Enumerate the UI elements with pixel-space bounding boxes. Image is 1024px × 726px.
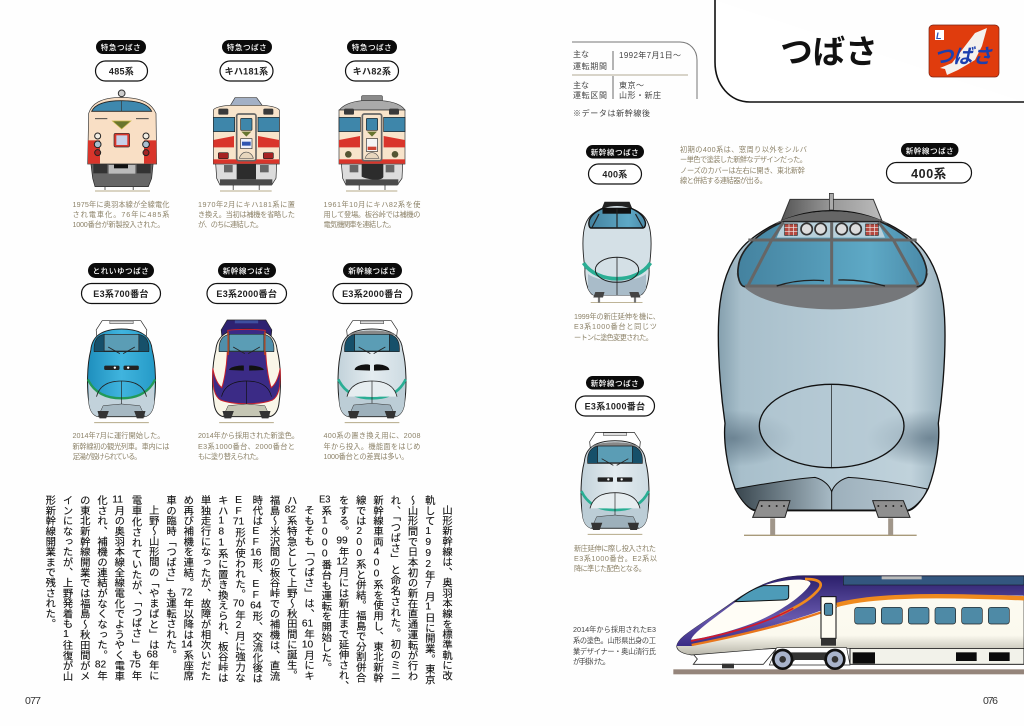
train: E3 2000 purple front — [213, 320, 280, 423]
caption — [574, 544, 657, 573]
label: 新幹線つばさ — [586, 145, 644, 158]
card: E3系1000番台 — [574, 376, 657, 573]
vertical body text: 電車化されていたが、「つばさ」も 75 年 — [129, 495, 141, 681]
caption — [198, 200, 295, 229]
label: 新幹線つばさ — [218, 263, 276, 278]
title panel — [715, 0, 1024, 102]
vertical body text: 11 月の奥羽本線全線電化でようやく電車 — [112, 495, 123, 681]
vertical body text: 車の臨時「つばさ」も運転された。 — [164, 495, 175, 660]
train: 485 series front — [88, 90, 157, 191]
vertical body text: キハ181系に置き換えられ、板谷峠は — [216, 495, 227, 682]
label: large 新幹線つばさ: 新幹線つばさ — [906, 146, 954, 156]
label: とれいゆつばさ: とれいゆつばさ — [93, 266, 149, 276]
card: E3系700番台 — [72, 263, 170, 461]
caption: 1975年に奥羽本線が全線電化 — [72, 200, 170, 209]
vertical body text: E3 系1000番台も運転を開始した。 — [319, 495, 330, 673]
label: 新幹線つばさ — [343, 263, 402, 278]
vertical body text: 化され、補機の連結がなくなった。 82 年 — [95, 495, 106, 681]
vertical body text: の東北新幹線開業では福島～秋田間がメ — [78, 495, 89, 681]
icon: tsubasa headmark logo: L — [936, 31, 942, 41]
caption: 1961年10月にキハ82系を使 — [324, 200, 420, 209]
caption: 用して登場。板谷峠では補機の — [324, 210, 420, 219]
vertical body text: ハ 82 系特急として上野～秋田間に誕生。 — [285, 495, 296, 680]
train: large 400 series front — [718, 193, 946, 536]
vertical body text: 形新幹線開業まで残された。 — [43, 495, 54, 629]
train: KiHa 82 front — [339, 96, 405, 191]
data table: 1992年7月1日～ — [619, 50, 681, 60]
caption: 1000番台との差異は多い。 — [324, 452, 408, 461]
caption — [574, 312, 660, 342]
label: E3系1000番台 — [576, 396, 654, 416]
label: 485系: 485系 — [109, 66, 134, 76]
caption: 年から投入。機能面をはじめ — [324, 442, 420, 451]
data table: 運転期間 — [573, 61, 607, 71]
vertical body text: そもそも「つばさ」は、 61 年 10 月にキ — [302, 505, 313, 681]
label: E3系700番台: E3系700番台 — [93, 288, 149, 299]
icon: tsubasa headmark logo: つばさ — [934, 46, 993, 68]
card: 400系 small — [574, 145, 660, 342]
label: 新幹線つばさ: 新幹線つばさ — [348, 266, 397, 276]
train: KiHa 181 front — [213, 98, 279, 191]
caption: 1999年の新庄延伸を機に、 — [574, 312, 660, 321]
note: 400 series description: ノーズのカバーは左右に開き、東北新幹 — [680, 166, 805, 175]
caption: 2014年7月に運行開始した。 — [72, 431, 164, 440]
caption: 2014年から採用された新塗色。 — [198, 431, 299, 440]
label: large 新幹線つばさ — [901, 143, 958, 157]
note: 400 series description — [680, 145, 807, 185]
label: キハ82系: キハ82系 — [353, 66, 391, 76]
label: 新幹線つばさ: 新幹線つばさ — [591, 147, 639, 157]
note: E3 livery: 系の塗色。山形県出身の工 — [573, 636, 656, 645]
label: E3系1000番台: E3系1000番台 — [585, 400, 645, 412]
caption: 新庄延伸に際し投入された — [574, 544, 656, 553]
note: 400 series description: 初期の400系は、窓周り以外をシルバ — [680, 145, 807, 154]
caption — [72, 431, 170, 461]
caption: 新幹線初の観光列車。車内には — [72, 442, 170, 451]
vertical body text: EF 71 形が使われた。 70 年2月に強力な — [233, 495, 244, 683]
note: 400 series description: ー単色で塗装した新鮮なデザインだった。 — [680, 155, 807, 164]
data table: 山形・新庄 — [619, 91, 661, 100]
vertical body text: 福島～米沢間の板谷峠での補機は、直流 — [268, 495, 278, 681]
train: E3 side view — [673, 576, 1024, 674]
train: E3 1000 front — [581, 432, 649, 534]
data table: 東京～ — [619, 80, 644, 90]
caption: 電気機関車を連結した。 — [324, 220, 396, 229]
card: E3系2000番台 silver — [324, 263, 420, 461]
label: キハ181系 — [220, 61, 273, 81]
card: 485系 — [72, 40, 170, 229]
label: 特急つばさ: 特急つばさ — [352, 42, 392, 52]
label: 400系 — [588, 164, 642, 184]
card: E3系2000番台 purple — [198, 263, 299, 461]
label: E3系2000番台: E3系2000番台 — [216, 288, 277, 299]
caption: E3系1000番台。E2系以 — [574, 554, 657, 563]
icon: tsubasa headmark logo — [929, 25, 999, 77]
card: キハ181系 — [198, 40, 295, 229]
caption: 足湯が設けられている。 — [72, 452, 142, 461]
vertical body text: 上野～山形間の「やまばと」は 68 年に — [147, 505, 158, 681]
caption: 400系の置き換え用に、2008 — [324, 431, 420, 440]
caption: が、のちに連結した。 — [198, 220, 263, 229]
vertical body text: ～山形間で日本初の新在直通運転が行わ — [406, 495, 416, 681]
vertical body text: をする。 99 年 12 月には新庄まで延伸され、 — [336, 495, 348, 691]
label: large 400系: 400系 — [911, 166, 947, 181]
vertical body text: 新幹線車両400系を使用し、東北新幹 — [371, 495, 382, 682]
label: E3系2000番台 — [207, 284, 286, 304]
label: 新幹線つばさ: 新幹線つばさ — [591, 378, 639, 388]
note: E3 livery: 2014年から採用されたE3 — [573, 625, 656, 634]
label: 485系 — [96, 61, 148, 81]
train: E3 700 front — [88, 321, 155, 423]
caption: 1970年2月にキハ181系に置 — [198, 200, 295, 209]
caption: 降に準じた配色となる。 — [574, 564, 646, 573]
caption: E3系1000番台、2000番台と — [198, 442, 295, 451]
data table: 主な — [573, 49, 589, 59]
vertical body text: 線では200系と併結。福島で分割併合 — [354, 495, 365, 682]
label: キハ181系: キハ181系 — [225, 66, 268, 76]
label: 特急つばさ — [222, 40, 272, 54]
label: 特急つばさ: 特急つばさ — [227, 42, 267, 52]
title: つばさ: つばさ — [780, 34, 878, 70]
data table: 主な — [573, 80, 589, 90]
label: E3系700番台 — [82, 284, 160, 304]
data table: 運転区間 — [573, 90, 607, 100]
vertical body text: 山形新幹線は、奥羽本線を標準軌に改 — [440, 505, 451, 681]
vertical body text: め再び補機を連結。 72 年以降は 14 系座席 — [181, 495, 192, 681]
caption — [198, 431, 299, 461]
caption: 1000番台が新製投入された。 — [72, 220, 164, 229]
label: large 400系 — [886, 162, 972, 183]
caption — [324, 200, 420, 229]
vertical body text: 単独走行になったが、故障が相次いだた — [198, 495, 210, 681]
note: E3 livery: が手掛けた。 — [573, 657, 610, 666]
label: E3系2000番台: E3系2000番台 — [342, 288, 403, 299]
label: 特急つばさ — [347, 40, 397, 54]
card: キハ82系 — [324, 40, 420, 229]
page number 076: 076 — [983, 695, 998, 707]
caption — [324, 431, 420, 461]
label: 400系: 400系 — [602, 170, 628, 180]
caption — [72, 200, 170, 229]
label: 特急つばさ — [96, 40, 146, 54]
vertical body text: インになったが、上野発着も1往復が山 — [60, 495, 72, 681]
caption: ートンに塗色変更された。 — [574, 333, 653, 342]
vertical body text: 時代はEF 16 形、EF 64 形、交流化後は — [250, 495, 261, 683]
note: E3 livery — [573, 625, 656, 666]
label: 新幹線つばさ — [586, 376, 644, 390]
train: E3 2000 silver front — [338, 321, 406, 423]
note: 400 series description: 線と併結する連結器が出る。 — [680, 176, 767, 185]
label: とれいゆつばさ — [88, 263, 154, 278]
note: E3 livery: 業デザイナー・奥山清行氏 — [573, 647, 656, 656]
label: 特急つばさ: 特急つばさ — [101, 42, 141, 52]
label: E3系2000番台 — [333, 284, 412, 304]
vertical body text: れ、「つばさ」と命名された。初のミニ — [388, 495, 399, 681]
data table: ※データは新幹線後 — [573, 108, 650, 118]
vertical body text — [43, 495, 452, 691]
caption: され電車化。76年に485系 — [72, 210, 170, 219]
label: 新幹線つばさ: 新幹線つばさ — [223, 266, 271, 276]
data table — [572, 42, 697, 118]
page number 077: 077 — [25, 695, 41, 707]
caption: もに塗り替えられた。 — [198, 452, 263, 461]
caption: E3系1000番台と同じツ — [574, 322, 657, 331]
vertical body text: 軌して1992年7月1日に開業。東京 — [423, 495, 434, 685]
train: 400 series small front — [583, 202, 651, 303]
caption: き換え。当初は補機を省略した — [198, 210, 295, 219]
label: キハ82系 — [346, 61, 398, 81]
